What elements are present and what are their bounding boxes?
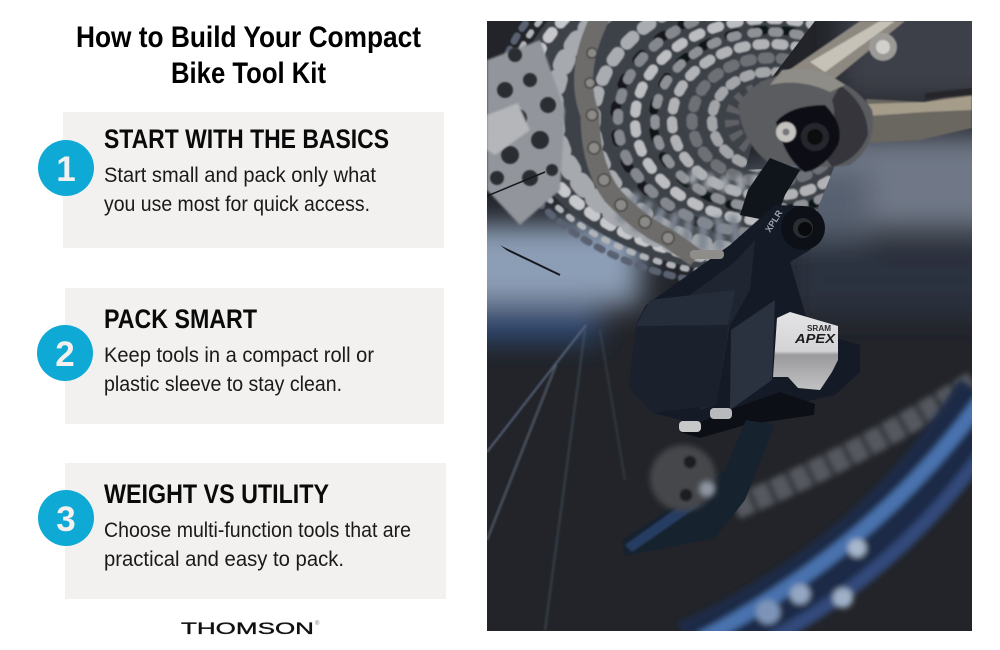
wheel rim bbox=[690, 395, 985, 650]
icon: number 1 badge: 1 bbox=[56, 150, 76, 189]
icon: number 3 badge: 3 bbox=[56, 500, 76, 539]
frame stays bbox=[786, 21, 972, 143]
logo: Thomson bbox=[181, 620, 320, 638]
title: Bike Tool Kit bbox=[171, 57, 326, 90]
bolts bbox=[710, 408, 732, 419]
chain bbox=[584, 10, 696, 258]
icon: number 1 badge bbox=[38, 140, 94, 196]
panel: pack smart bbox=[37, 288, 444, 424]
text: step 3 description: Choose multi-function tools that are bbox=[104, 518, 411, 542]
title bbox=[76, 21, 421, 90]
cassette gears bbox=[487, 21, 834, 282]
text: step 1 description: Start small and pack only what bbox=[104, 163, 376, 187]
text: step 2 description: plastic sleeve to stay clean. bbox=[104, 372, 342, 396]
panel: weight vs utility bbox=[38, 463, 446, 599]
lower cage bbox=[622, 420, 775, 556]
text: step 3 description: practical and easy to pack. bbox=[104, 547, 344, 571]
component label: SRAM Apex: SRAM bbox=[807, 324, 831, 333]
title: How to Build Your Compact bbox=[76, 21, 421, 54]
spider arm honeycomb bbox=[487, 40, 565, 225]
photo background blur bbox=[487, 21, 972, 356]
text: step 2 description bbox=[104, 343, 374, 396]
spokes bbox=[487, 325, 625, 630]
icon: number 3 badge bbox=[38, 490, 94, 546]
icon: number 2 badge: 2 bbox=[55, 335, 75, 374]
derailleur body bbox=[622, 158, 860, 556]
blurred chain bbox=[735, 382, 975, 508]
panel: start with the basics bbox=[38, 112, 444, 248]
text: step 3 description bbox=[104, 518, 411, 571]
logo: Thomson: ® bbox=[315, 620, 320, 627]
text: XPLR mark: XPLR bbox=[763, 208, 785, 234]
heading: step 1: START WITH THE BASICS bbox=[104, 124, 389, 154]
photo: bicycle rear derailleur and cassette bbox=[487, 21, 972, 631]
lower bright cassette zone bbox=[625, 175, 770, 234]
dropout hanger bbox=[738, 69, 873, 172]
component label: SRAM Apex: APEX bbox=[794, 331, 836, 346]
heading: step 3: WEIGHT VS UTILITY bbox=[104, 479, 329, 509]
text: step 1 description: you use most for quick access. bbox=[104, 192, 370, 216]
text: step 1 description bbox=[104, 163, 376, 216]
icon: number 2 badge bbox=[37, 325, 93, 381]
logo: Thomson: THOMSON bbox=[181, 620, 314, 638]
heading: step 2: PACK SMART bbox=[104, 304, 257, 334]
text: step 2 description: Keep tools in a compact roll or bbox=[104, 343, 374, 367]
component label: SRAM Apex bbox=[773, 312, 838, 390]
